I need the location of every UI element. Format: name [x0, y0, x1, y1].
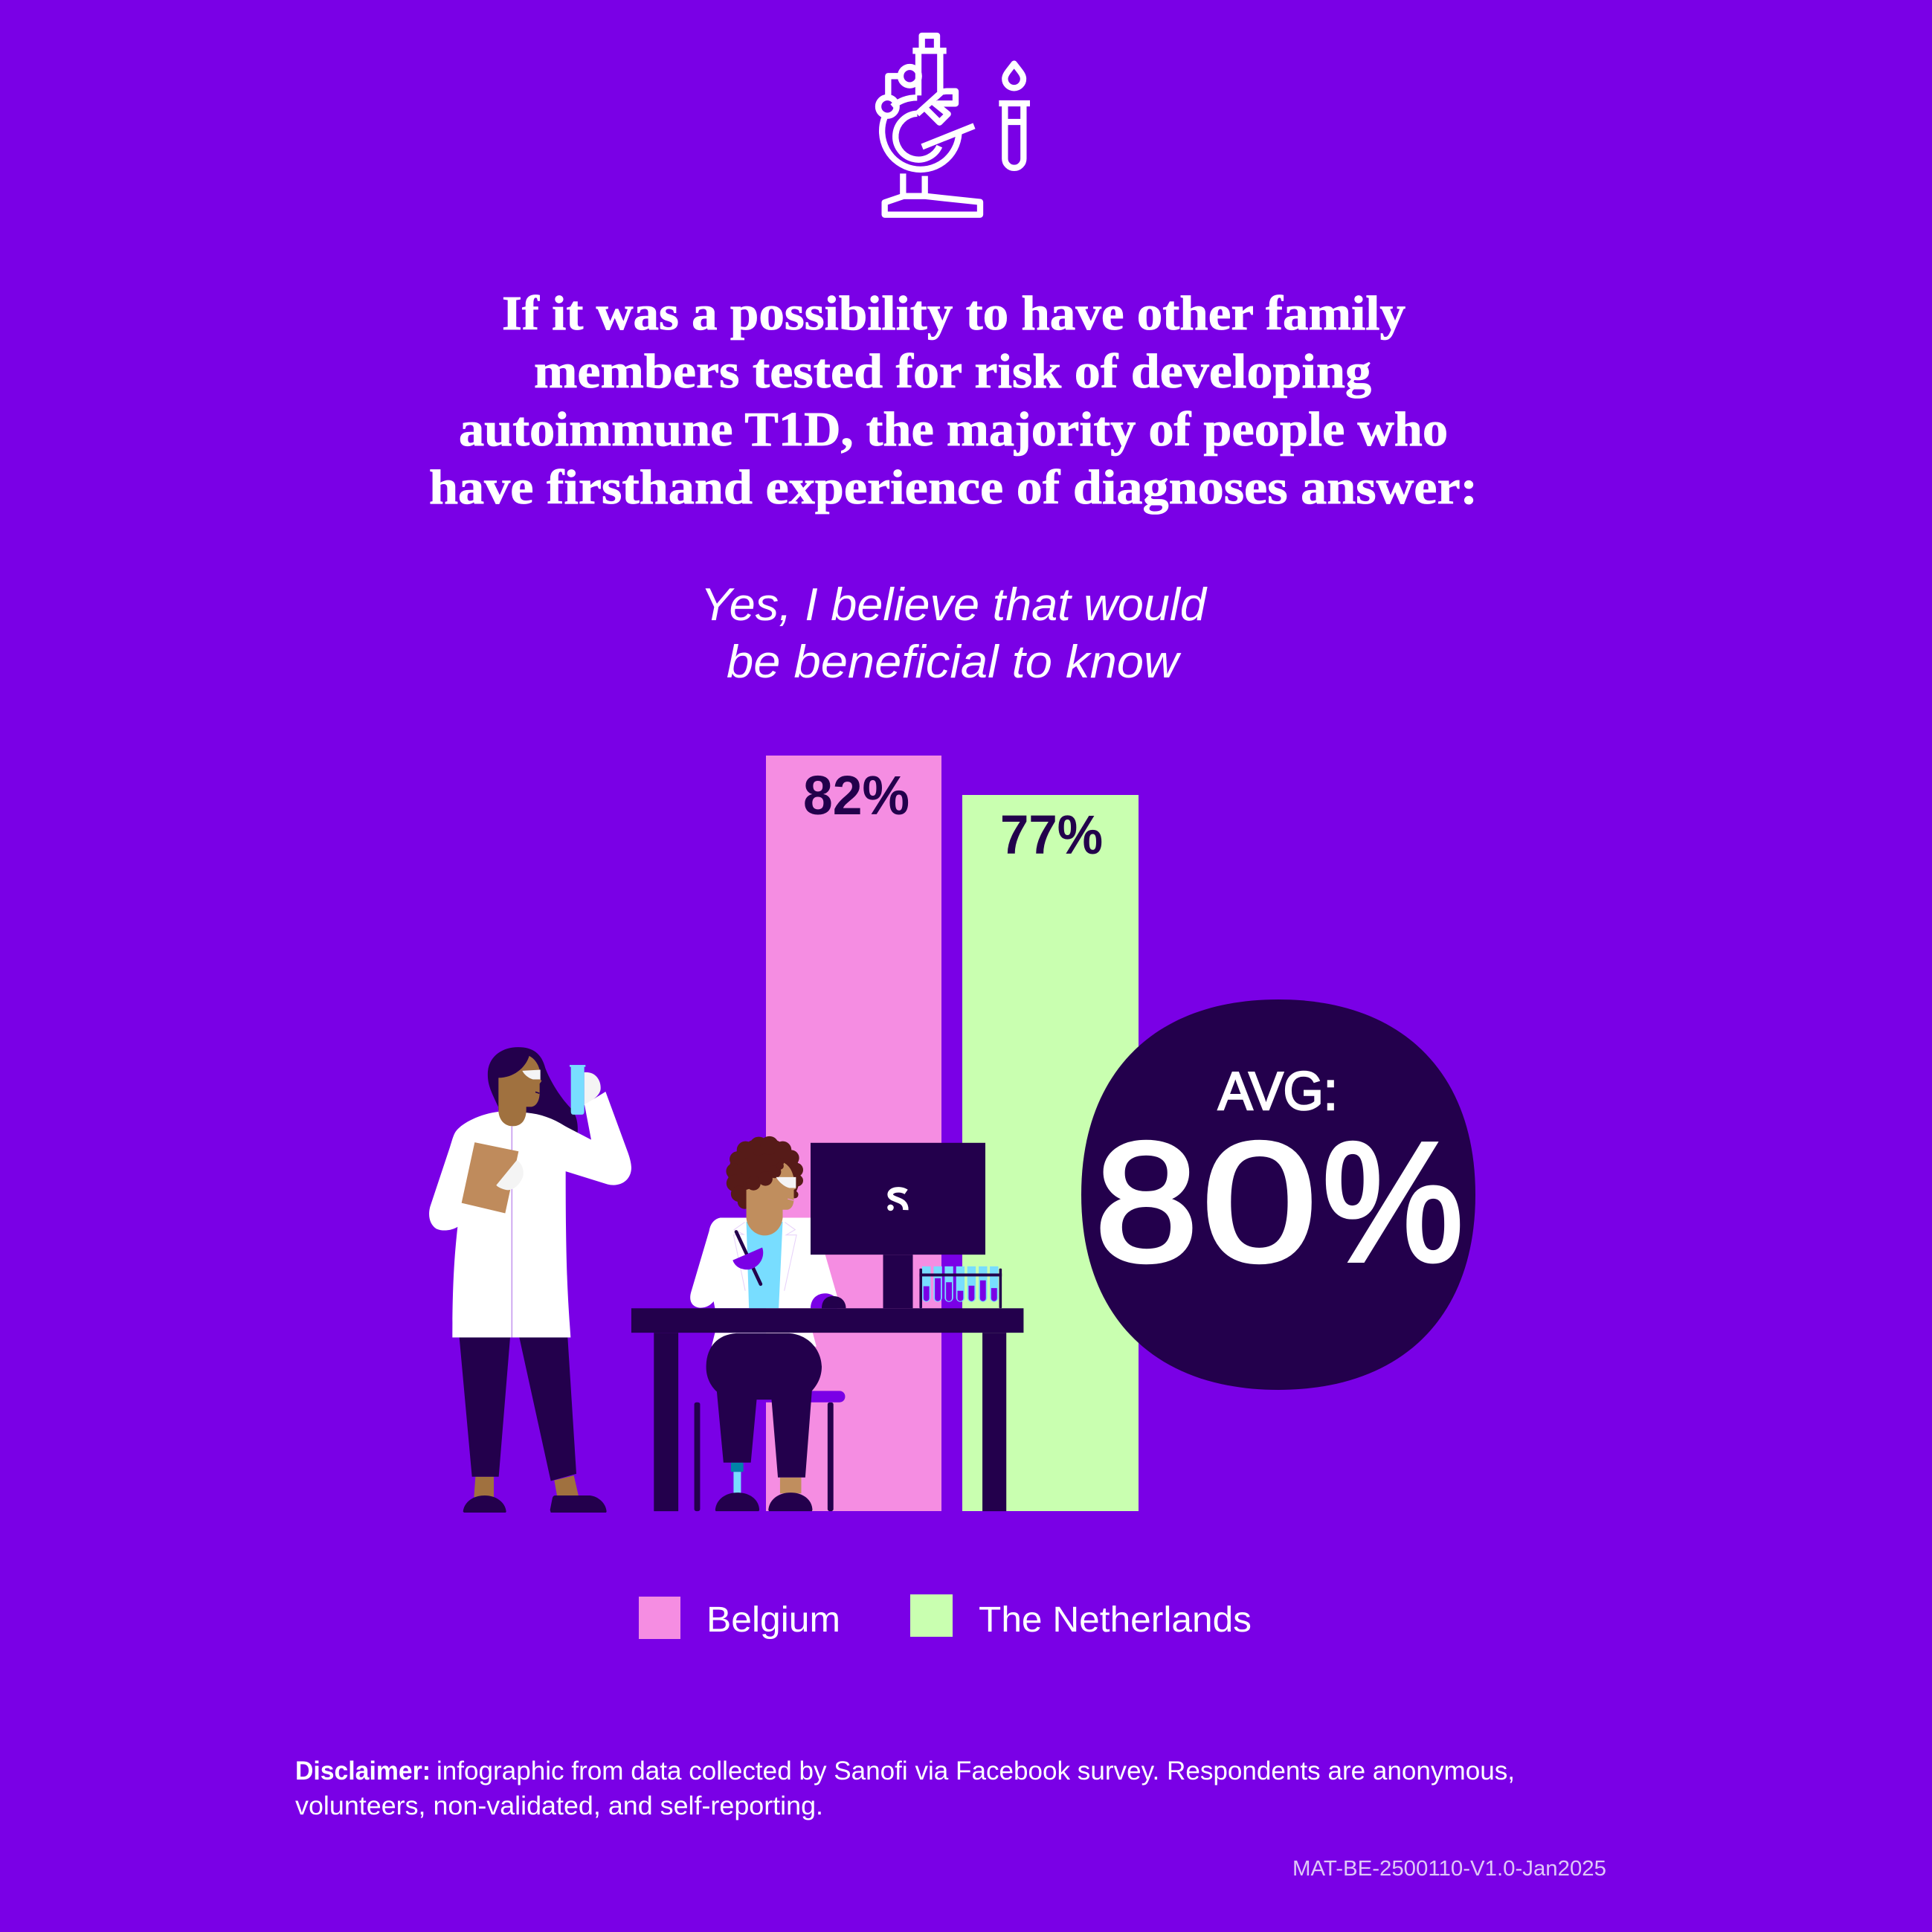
callout: average 80%: 8: [1095, 1108, 1198, 1297]
heading: members tested for risk of developing: [534, 344, 1371, 399]
legend item: The Netherlands: [910, 1594, 1252, 1640]
legend: [639, 1594, 1252, 1640]
heading: [429, 286, 1478, 515]
desk: [631, 1308, 1023, 1511]
bar: Belgium 82%: [766, 756, 941, 1511]
disclaimer: volunteers, non-validated, and self-reporting.: [295, 1791, 823, 1820]
callout: average 80%: %: [1322, 1108, 1464, 1297]
illustration: standing scientist: [429, 1047, 631, 1513]
legend item: Belgium: Belgium: [706, 1600, 840, 1640]
pen and bowl: [736, 1231, 761, 1284]
bar chart: [766, 756, 1139, 1511]
italic answer text: be beneficial to know: [727, 637, 1182, 688]
stool: [695, 1391, 845, 1511]
bar: The Netherlands 77%: 77%: [1000, 804, 1103, 866]
legs: [780, 1478, 801, 1493]
disclaimer: [295, 1756, 1515, 1820]
material code: MAT-BE-2500110-V1.0-Jan2025: [1292, 1857, 1606, 1881]
legend item: The Netherlands: The Netherlands: [979, 1600, 1252, 1640]
italic answer text: Yes, I believe that would: [701, 579, 1208, 631]
legend item: Belgium: [639, 1597, 840, 1640]
callout: average 80%: AVG:: [1218, 1062, 1338, 1121]
italic answer text: [701, 579, 1208, 688]
callout: average 80%: [1081, 999, 1475, 1390]
disclaimer: Disclaimer:: [295, 1756, 431, 1786]
head: [747, 1163, 796, 1235]
disclaimer: infographic from data collected by Sanofi via Facebook survey. Respondents are anonymous,: [437, 1756, 1515, 1786]
monitor: [811, 1143, 985, 1308]
lab coat: [690, 1217, 837, 1308]
icon: microscope and test tube: [878, 36, 1030, 215]
heading: have firsthand experience of diagnoses answer:: [429, 460, 1478, 515]
fringe: [747, 1162, 784, 1191]
hand and mouse: [811, 1293, 837, 1308]
hair: [726, 1136, 803, 1212]
bar: Belgium 82%: 82%: [803, 764, 909, 826]
test tube rack: [919, 1266, 1002, 1308]
callout: average 80%: 0: [1202, 1108, 1317, 1297]
bar: The Netherlands 77%: [962, 795, 1139, 1511]
heading: If it was a possibility to have other family: [502, 286, 1405, 341]
illustration: seated scientist at desk: [631, 1136, 1023, 1511]
heading: autoimmune T1D, the majority of people who: [459, 402, 1448, 457]
